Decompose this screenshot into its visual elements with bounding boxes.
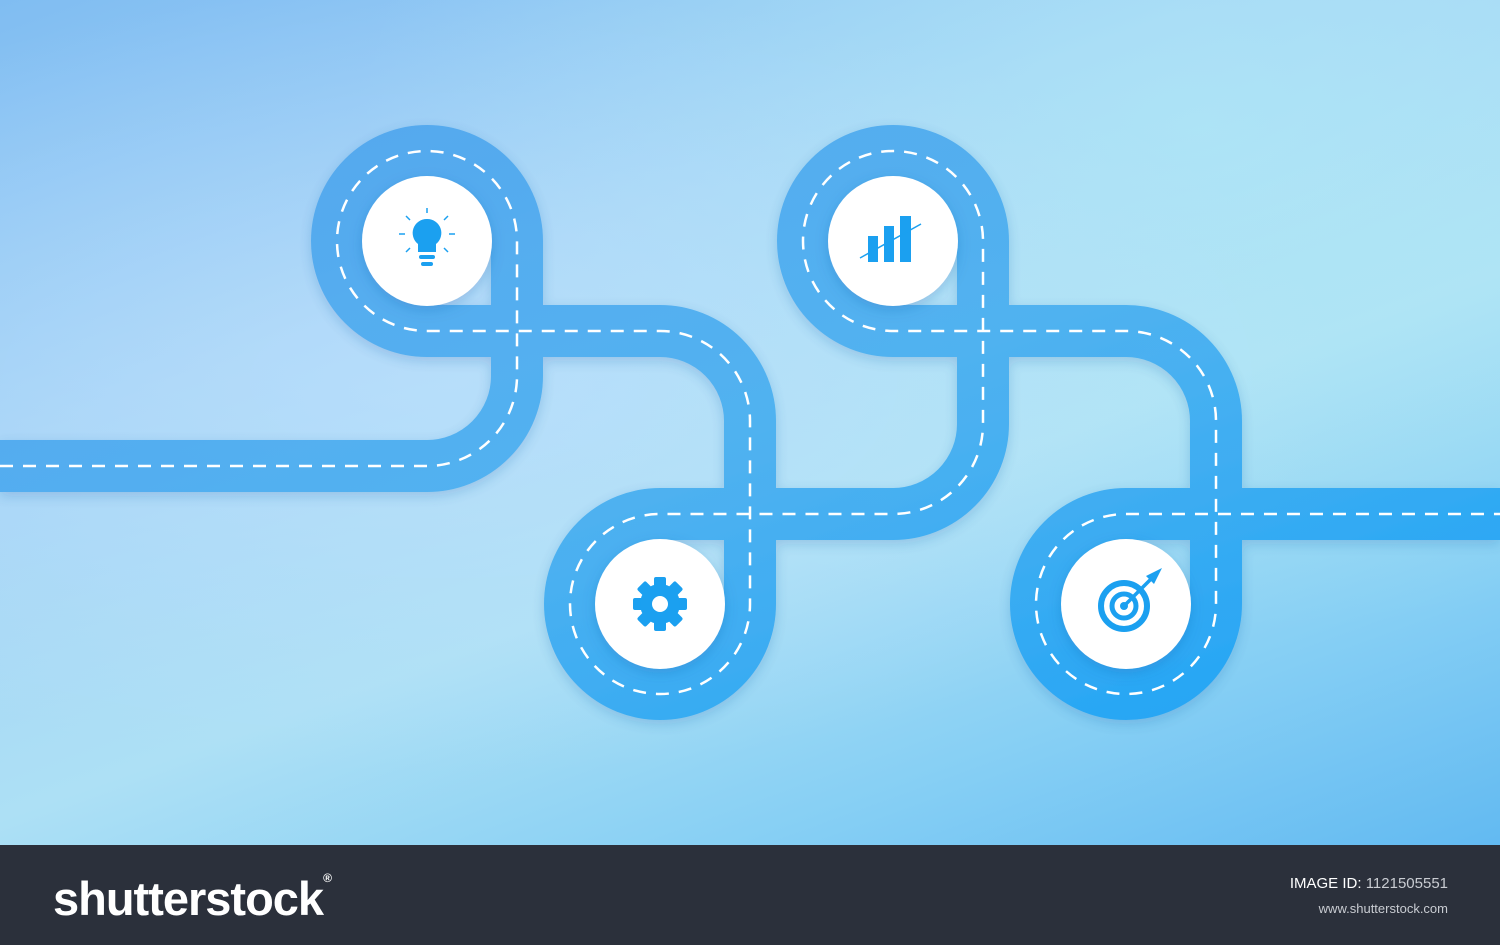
step 3: bar chart (828, 176, 958, 306)
url: www.shutterstock.com (1319, 901, 1448, 916)
logo: shutterstock® (53, 871, 331, 925)
road (0, 151, 1500, 694)
step 4: target (1061, 539, 1191, 669)
image id: IMAGE ID: 1121505551 (1290, 875, 1448, 892)
step 1: lightbulb (362, 176, 492, 306)
footer (0, 845, 1500, 945)
step 2: gear (595, 539, 725, 669)
